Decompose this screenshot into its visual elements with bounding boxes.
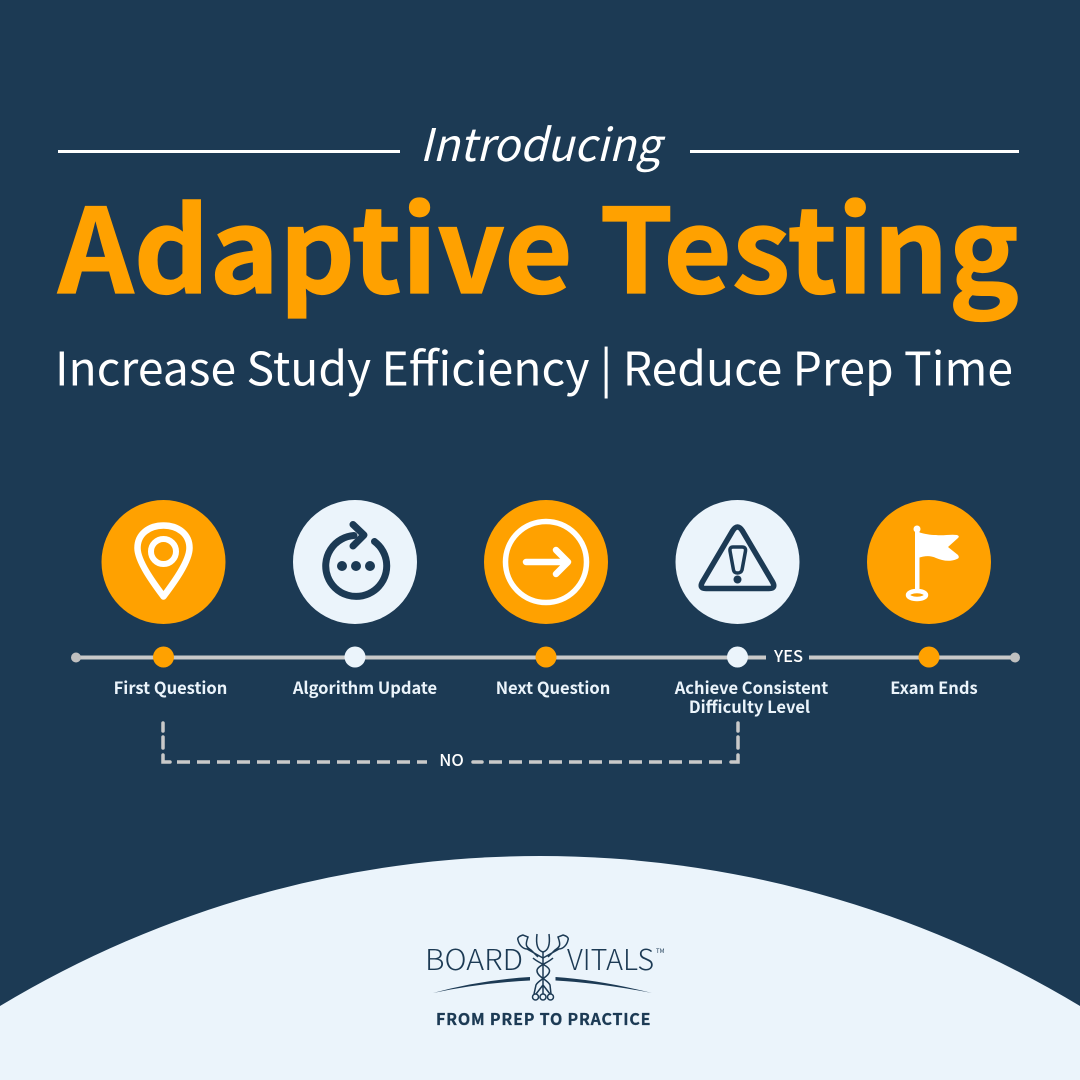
logo: BOARD — [425, 938, 523, 979]
step labels: Exam Ends — [890, 675, 978, 699]
subtitle: Increase Study Efficiency | Reduce Prep Time — [55, 332, 1013, 400]
logo: TM — [656, 946, 665, 955]
step labels: Next Question — [496, 675, 610, 699]
bottom arc panel — [0, 856, 1080, 1080]
icon: arrow in circle — [484, 500, 608, 624]
logo: FROM PREP TO PRACTICE — [436, 1006, 650, 1030]
step labels: Achieve Consistent — [674, 675, 828, 699]
step labels: Difficulty Level — [689, 694, 810, 718]
intro heading with rules: Introducing — [420, 109, 666, 174]
icon: flag — [867, 500, 991, 624]
title: Adaptive Testing — [57, 157, 1019, 327]
icon: refresh with dots — [293, 500, 417, 624]
icon: warning triangle — [676, 500, 800, 624]
step labels: Algorithm Update — [292, 675, 437, 699]
logo — [425, 934, 665, 1030]
dashed NO loop — [163, 723, 738, 771]
timeline: YES — [773, 643, 803, 667]
step labels: First Question — [114, 675, 227, 699]
intro heading with rules — [58, 109, 1019, 174]
logo: VITALS — [567, 938, 654, 979]
icon: location pin — [102, 500, 226, 624]
timeline — [71, 643, 1020, 668]
step labels — [114, 675, 978, 718]
dashed NO loop: NO — [439, 747, 464, 771]
